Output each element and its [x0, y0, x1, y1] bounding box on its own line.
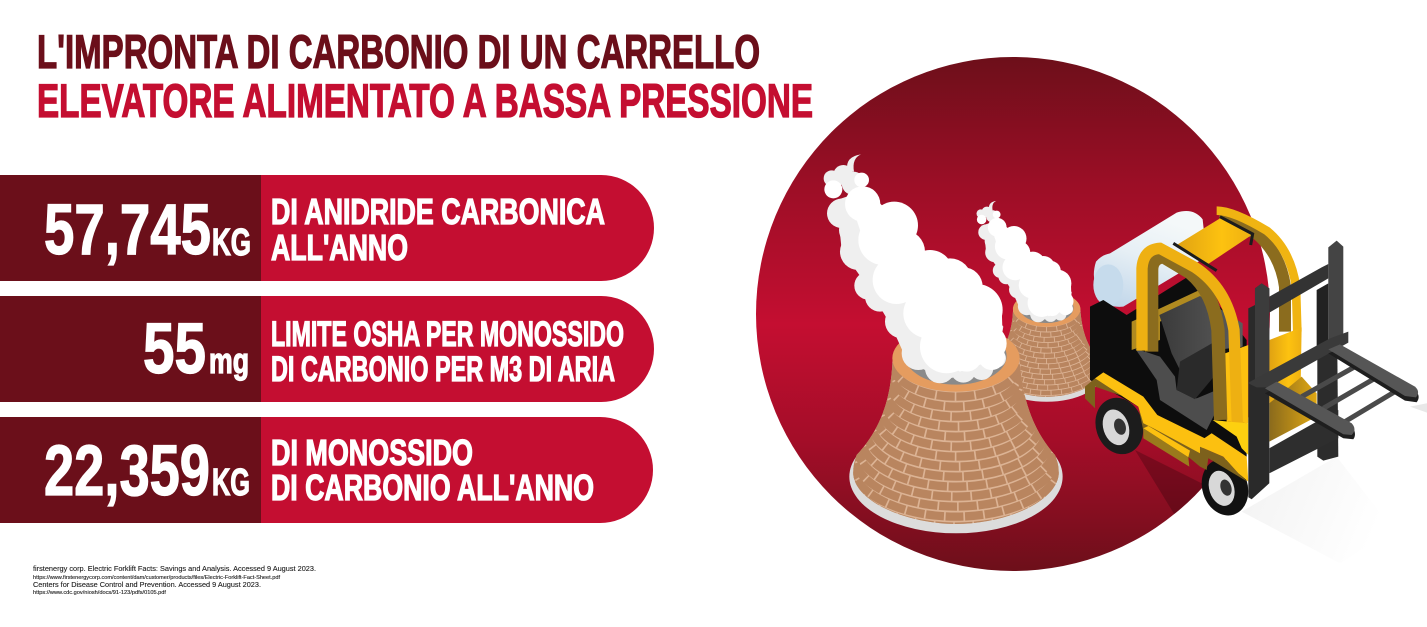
- gas tank: [1093, 211, 1207, 307]
- description: DI ANIDRIDE CARBONICA: [271, 191, 605, 232]
- source notes: firstenergy corp. Electric Forklift Facts: Savings and Analysis. Accessed 9 August 2023.: [33, 564, 316, 573]
- near roll-cage hoop: [1142, 248, 1237, 423]
- red background circle: [756, 57, 1270, 571]
- driver seat: [1135, 296, 1243, 430]
- rear wheel: [1088, 392, 1150, 460]
- engine body: [1090, 273, 1247, 457]
- source notes: Centers for Disease Control and Prevention. Accessed 9 August 2023.: [33, 580, 261, 589]
- far tower with smoke: [977, 201, 1105, 402]
- stat row 3: carbon monoxide: [0, 417, 653, 523]
- yellow front panels: [1225, 327, 1317, 442]
- stat row 1: carbon dioxide: [0, 175, 654, 281]
- mast: [1248, 241, 1348, 499]
- cooling towers: [824, 154, 1105, 533]
- description: [271, 432, 594, 508]
- rear yellow plate: [1132, 287, 1207, 350]
- value 22,359 KG: 22,359: [44, 432, 210, 511]
- description: LIMITE OSHA PER MONOSSIDO: [271, 315, 624, 354]
- value 57,745 KG: KG: [212, 222, 251, 264]
- description: DI CARBONIO PER M3 DI ARIA: [271, 350, 615, 389]
- forklift shadow on circle: [1135, 450, 1202, 514]
- roof plate: [1173, 217, 1253, 271]
- title line 2: ELEVATORE ALIMENTATO A BASSA PRESSIONE: [37, 74, 813, 127]
- forks: [1265, 344, 1419, 439]
- smoke: [824, 154, 1006, 383]
- description: DI CARBONIO ALL'ANNO: [271, 467, 594, 508]
- description: DI MONOSSIDO: [271, 432, 473, 473]
- near tower with smoke: [824, 154, 1067, 533]
- chassis: [1085, 372, 1248, 482]
- description: [271, 315, 624, 389]
- title line 1: L'IMPRONTA DI CARBONIO DI UN CARRELLO: [37, 25, 760, 78]
- far roll-cage hoop: [1217, 211, 1297, 332]
- value 22,359 KG: KG: [212, 462, 250, 504]
- source notes: https://www.cdc.gov/niosh/docs/91-123/pdfs/0105.pdf: [33, 590, 167, 596]
- description: [271, 191, 605, 268]
- floor shadow of forklift: [1242, 403, 1427, 563]
- source notes: https://www.firstenergycorp.com/content/dam/customer/products/files/Electric-Forklift-Fact-Sheet.pdf: [33, 575, 281, 581]
- value 55 mg: mg: [209, 340, 249, 381]
- value 57,745 KG: 57,745: [44, 191, 211, 270]
- front wheel: [1195, 453, 1255, 522]
- stat row 2: OSHA limit: [0, 296, 654, 402]
- description: ALL'ANNO: [271, 227, 408, 268]
- forklift: [1085, 211, 1419, 522]
- source notes: [33, 564, 316, 596]
- value 55 mg: 55: [143, 310, 206, 389]
